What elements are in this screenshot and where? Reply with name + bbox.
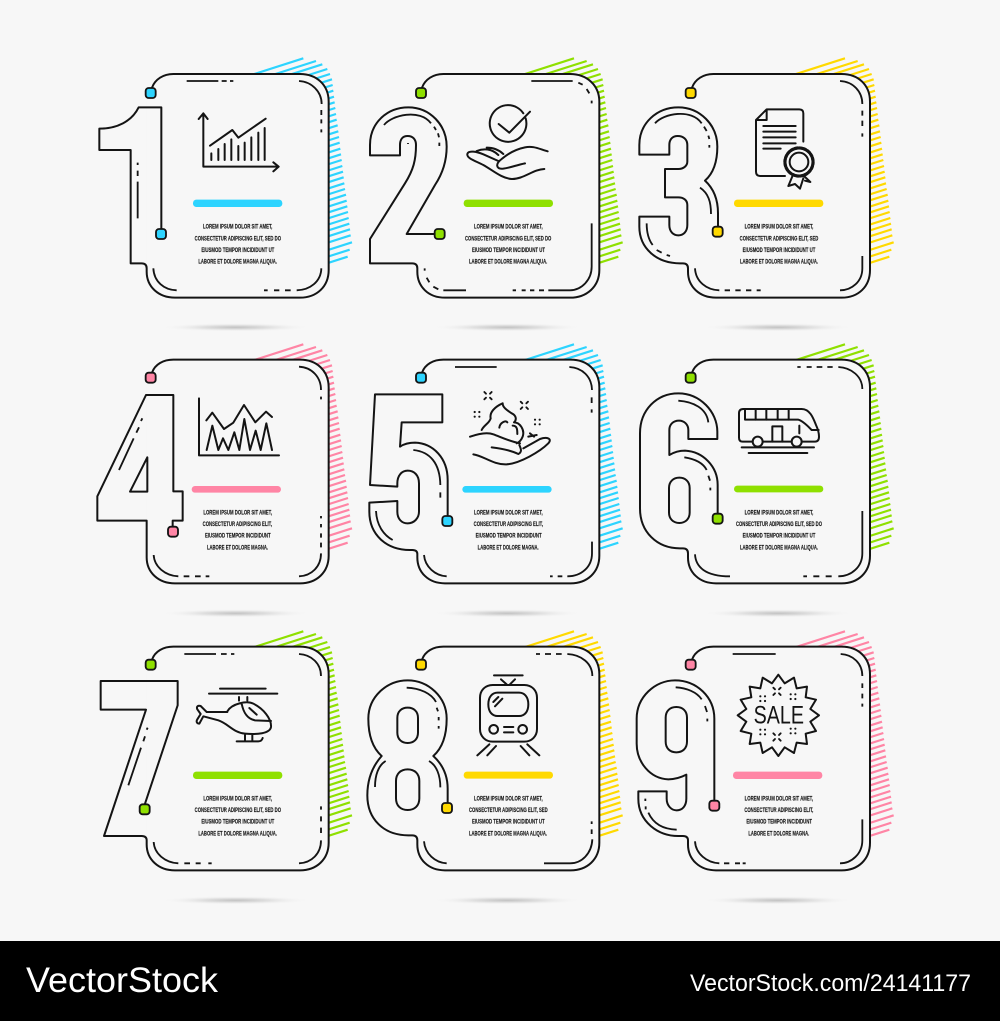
stripes	[778, 58, 894, 278]
connector node bottom	[709, 801, 719, 811]
panel: step 2	[370, 58, 623, 332]
outlined frame and number 8	[367, 647, 599, 870]
icon: growth chart	[199, 113, 279, 171]
shadow	[703, 896, 853, 905]
connector node top	[146, 88, 156, 98]
accent bar	[462, 486, 552, 493]
icon: sale badge: SALE	[754, 703, 804, 730]
text block	[736, 509, 822, 551]
panel: step 3	[639, 58, 894, 332]
stripes	[237, 344, 352, 564]
icon: line chart	[199, 398, 279, 455]
card background	[147, 360, 329, 583]
text block: LOREM IPSUM DOLOR SIT AMET,	[745, 795, 813, 802]
outlined frame and number 5	[369, 360, 599, 583]
text block: LOREM IPSUM DOLOR SIT AMET,	[745, 509, 813, 516]
shadow	[161, 896, 311, 905]
frame dashes	[138, 81, 322, 290]
text block	[474, 509, 543, 551]
connector node bottom	[713, 514, 723, 524]
text block	[203, 509, 272, 551]
text block: LABORE ET DOLORE MAGNA.	[478, 544, 539, 551]
text block	[195, 795, 281, 837]
panel: step 8	[367, 631, 623, 905]
text block: CONSECTETUR ADIPISCING ELIT, SED	[469, 807, 548, 814]
text block	[740, 224, 818, 266]
frame dashes	[128, 654, 321, 863]
card background	[688, 647, 870, 870]
frame dashes	[645, 654, 862, 863]
outlined frame and number 1	[99, 74, 329, 298]
connector node bottom	[713, 227, 723, 237]
outlined frame and number 9	[637, 647, 870, 870]
accent bar	[192, 486, 281, 493]
footer image id: VectorStock.com/24141177	[690, 970, 971, 997]
text block: EIUSMOD TEMPOR INCIDIDUNT	[205, 533, 271, 540]
text block: LOREM IPSUM DOLOR SIT AMET,	[745, 224, 813, 231]
frame dashes	[647, 81, 862, 290]
panel: step 5	[369, 344, 623, 618]
card background	[417, 647, 599, 870]
shadow	[161, 323, 311, 332]
stripes	[507, 58, 623, 278]
card background	[417, 360, 599, 583]
text block: LOREM IPSUM DOLOR SIT AMET,	[474, 509, 543, 516]
text block: EIUSMOD TEMPOR INCIDIDUNT UT	[201, 247, 274, 254]
panel: step 1	[99, 58, 352, 332]
accent bar	[193, 772, 282, 779]
shadow	[703, 609, 853, 618]
icon: helicopter	[197, 689, 277, 741]
text block: EIUSMOD TEMPOR INCIDIDUNT UT	[201, 819, 274, 826]
text block: EIUSMOD TEMPOR INCIDIDUNT UT	[743, 533, 815, 540]
accent bar	[464, 772, 553, 779]
panel: step 4	[97, 344, 352, 618]
panel: step 7	[101, 631, 352, 905]
stripes	[237, 58, 352, 278]
icon: check over hand	[467, 105, 548, 179]
frame dashes	[384, 81, 592, 290]
footer band	[0, 941, 1000, 1021]
text block	[744, 795, 813, 837]
accent bar	[193, 200, 282, 207]
text block: LOREM IPSUM DOLOR SIT AMET,	[203, 224, 272, 231]
text block: CONSECTETUR ADIPISCING ELIT, SED DO	[465, 235, 551, 242]
text block: LABORE ET DOLORE MAGNA ALIQUA.	[469, 259, 547, 266]
frame dashes	[119, 367, 321, 576]
connector node bottom	[140, 804, 150, 814]
text block: LABORE ET DOLORE MAGNA ALIQUA.	[469, 830, 547, 837]
connector node bottom	[435, 229, 445, 239]
accent bar	[464, 200, 553, 207]
text block: LABORE ET DOLORE MAGNA ALIQUA.	[198, 259, 277, 266]
text block: EIUSMOD TEMPOR INCIDIDUNT	[476, 533, 542, 540]
shadow	[703, 323, 853, 332]
card background	[417, 74, 599, 298]
stripes	[507, 344, 623, 564]
frame dashes	[375, 654, 592, 863]
outlined frame and number 3	[639, 74, 870, 298]
shadow	[432, 609, 582, 618]
text block	[465, 224, 551, 266]
text block: LOREM IPSUM DOLOR SIT AMET,	[474, 795, 543, 802]
shadow	[432, 323, 582, 332]
text block: LABORE ET DOLORE MAGNA ALIQUA.	[740, 544, 818, 551]
text block: CONSECTETUR ADIPISCING ELIT, SED DO	[195, 807, 281, 814]
shadow	[161, 609, 311, 618]
text block: LOREM IPSUM DOLOR SIT AMET,	[474, 224, 543, 231]
stripes	[237, 631, 352, 851]
accent bar	[733, 772, 822, 779]
accent bar	[734, 486, 823, 492]
text block: CONSECTETUR ADIPISCING ELIT, SED DO	[736, 521, 822, 528]
panel: step 9	[637, 631, 894, 905]
stripes	[778, 631, 894, 851]
outlined frame and number 7	[101, 647, 329, 870]
frame dashes	[376, 367, 592, 576]
text block: CONSECTETUR ADIPISCING ELIT,	[203, 521, 272, 528]
connector node bottom	[156, 229, 166, 239]
stripes	[507, 631, 623, 851]
connector node bottom	[168, 527, 178, 537]
connector node top	[416, 88, 426, 98]
text block: CONSECTETUR ADIPISCING ELIT,	[474, 521, 543, 528]
text block: EIUSMOD TEMPOR INCIDIDUNT UT	[472, 247, 545, 254]
icon: sale badge	[738, 675, 819, 756]
connector node bottom	[442, 803, 452, 813]
card background	[147, 74, 329, 298]
card background	[688, 360, 870, 583]
panel: step 6	[640, 344, 894, 618]
card background	[688, 74, 870, 298]
text block: CONSECTETUR ADIPISCING ELIT, SED DO	[195, 235, 281, 242]
connector node top	[686, 373, 696, 383]
outlined frame and number 4	[97, 360, 329, 583]
text block: LABORE ET DOLORE MAGNA ALIQUA.	[198, 830, 277, 837]
icon: train	[477, 675, 539, 755]
footer brand: VectorStock	[26, 961, 219, 1000]
stripes	[778, 344, 894, 564]
text block: EIUSMOD TEMPOR INCIDIDUNT	[746, 819, 812, 826]
text block	[469, 795, 548, 837]
connector node top	[686, 88, 696, 98]
shadow	[432, 896, 582, 905]
text block	[195, 224, 281, 266]
connector node top	[416, 660, 426, 670]
icon: certificate	[756, 109, 813, 189]
connector node top	[146, 373, 156, 383]
outlined frame and number 2	[370, 74, 599, 298]
icon: bus	[739, 409, 819, 453]
text block: LABORE ET DOLORE MAGNA.	[207, 544, 268, 551]
text block: CONSECTETUR ADIPISCING ELIT,	[744, 807, 813, 814]
accent bar	[734, 200, 823, 207]
card background	[147, 647, 329, 870]
connector node top	[686, 660, 696, 670]
connector node top	[146, 660, 156, 670]
text block: LABORE ET DOLORE MAGNA.	[748, 830, 809, 837]
connector node bottom	[442, 516, 452, 526]
frame dashes	[678, 367, 862, 576]
outlined frame and number 6	[640, 360, 870, 583]
text block: CONSECTETUR ADIPISCING ELIT, SED	[740, 235, 818, 242]
text block: EIUSMOD TEMPOR INCIDIDUNT UT	[472, 819, 545, 826]
icon: foam on hand	[470, 392, 550, 464]
text block: EIUSMOD TEMPOR INCIDIDUNT UT	[743, 247, 815, 254]
connector node top	[416, 373, 426, 383]
text block: LOREM IPSUM DOLOR SIT AMET,	[203, 795, 272, 802]
text block: LOREM IPSUM DOLOR SIT AMET,	[203, 509, 272, 516]
text block: LABORE ET DOLORE MAGNA ALIQUA.	[740, 259, 818, 266]
